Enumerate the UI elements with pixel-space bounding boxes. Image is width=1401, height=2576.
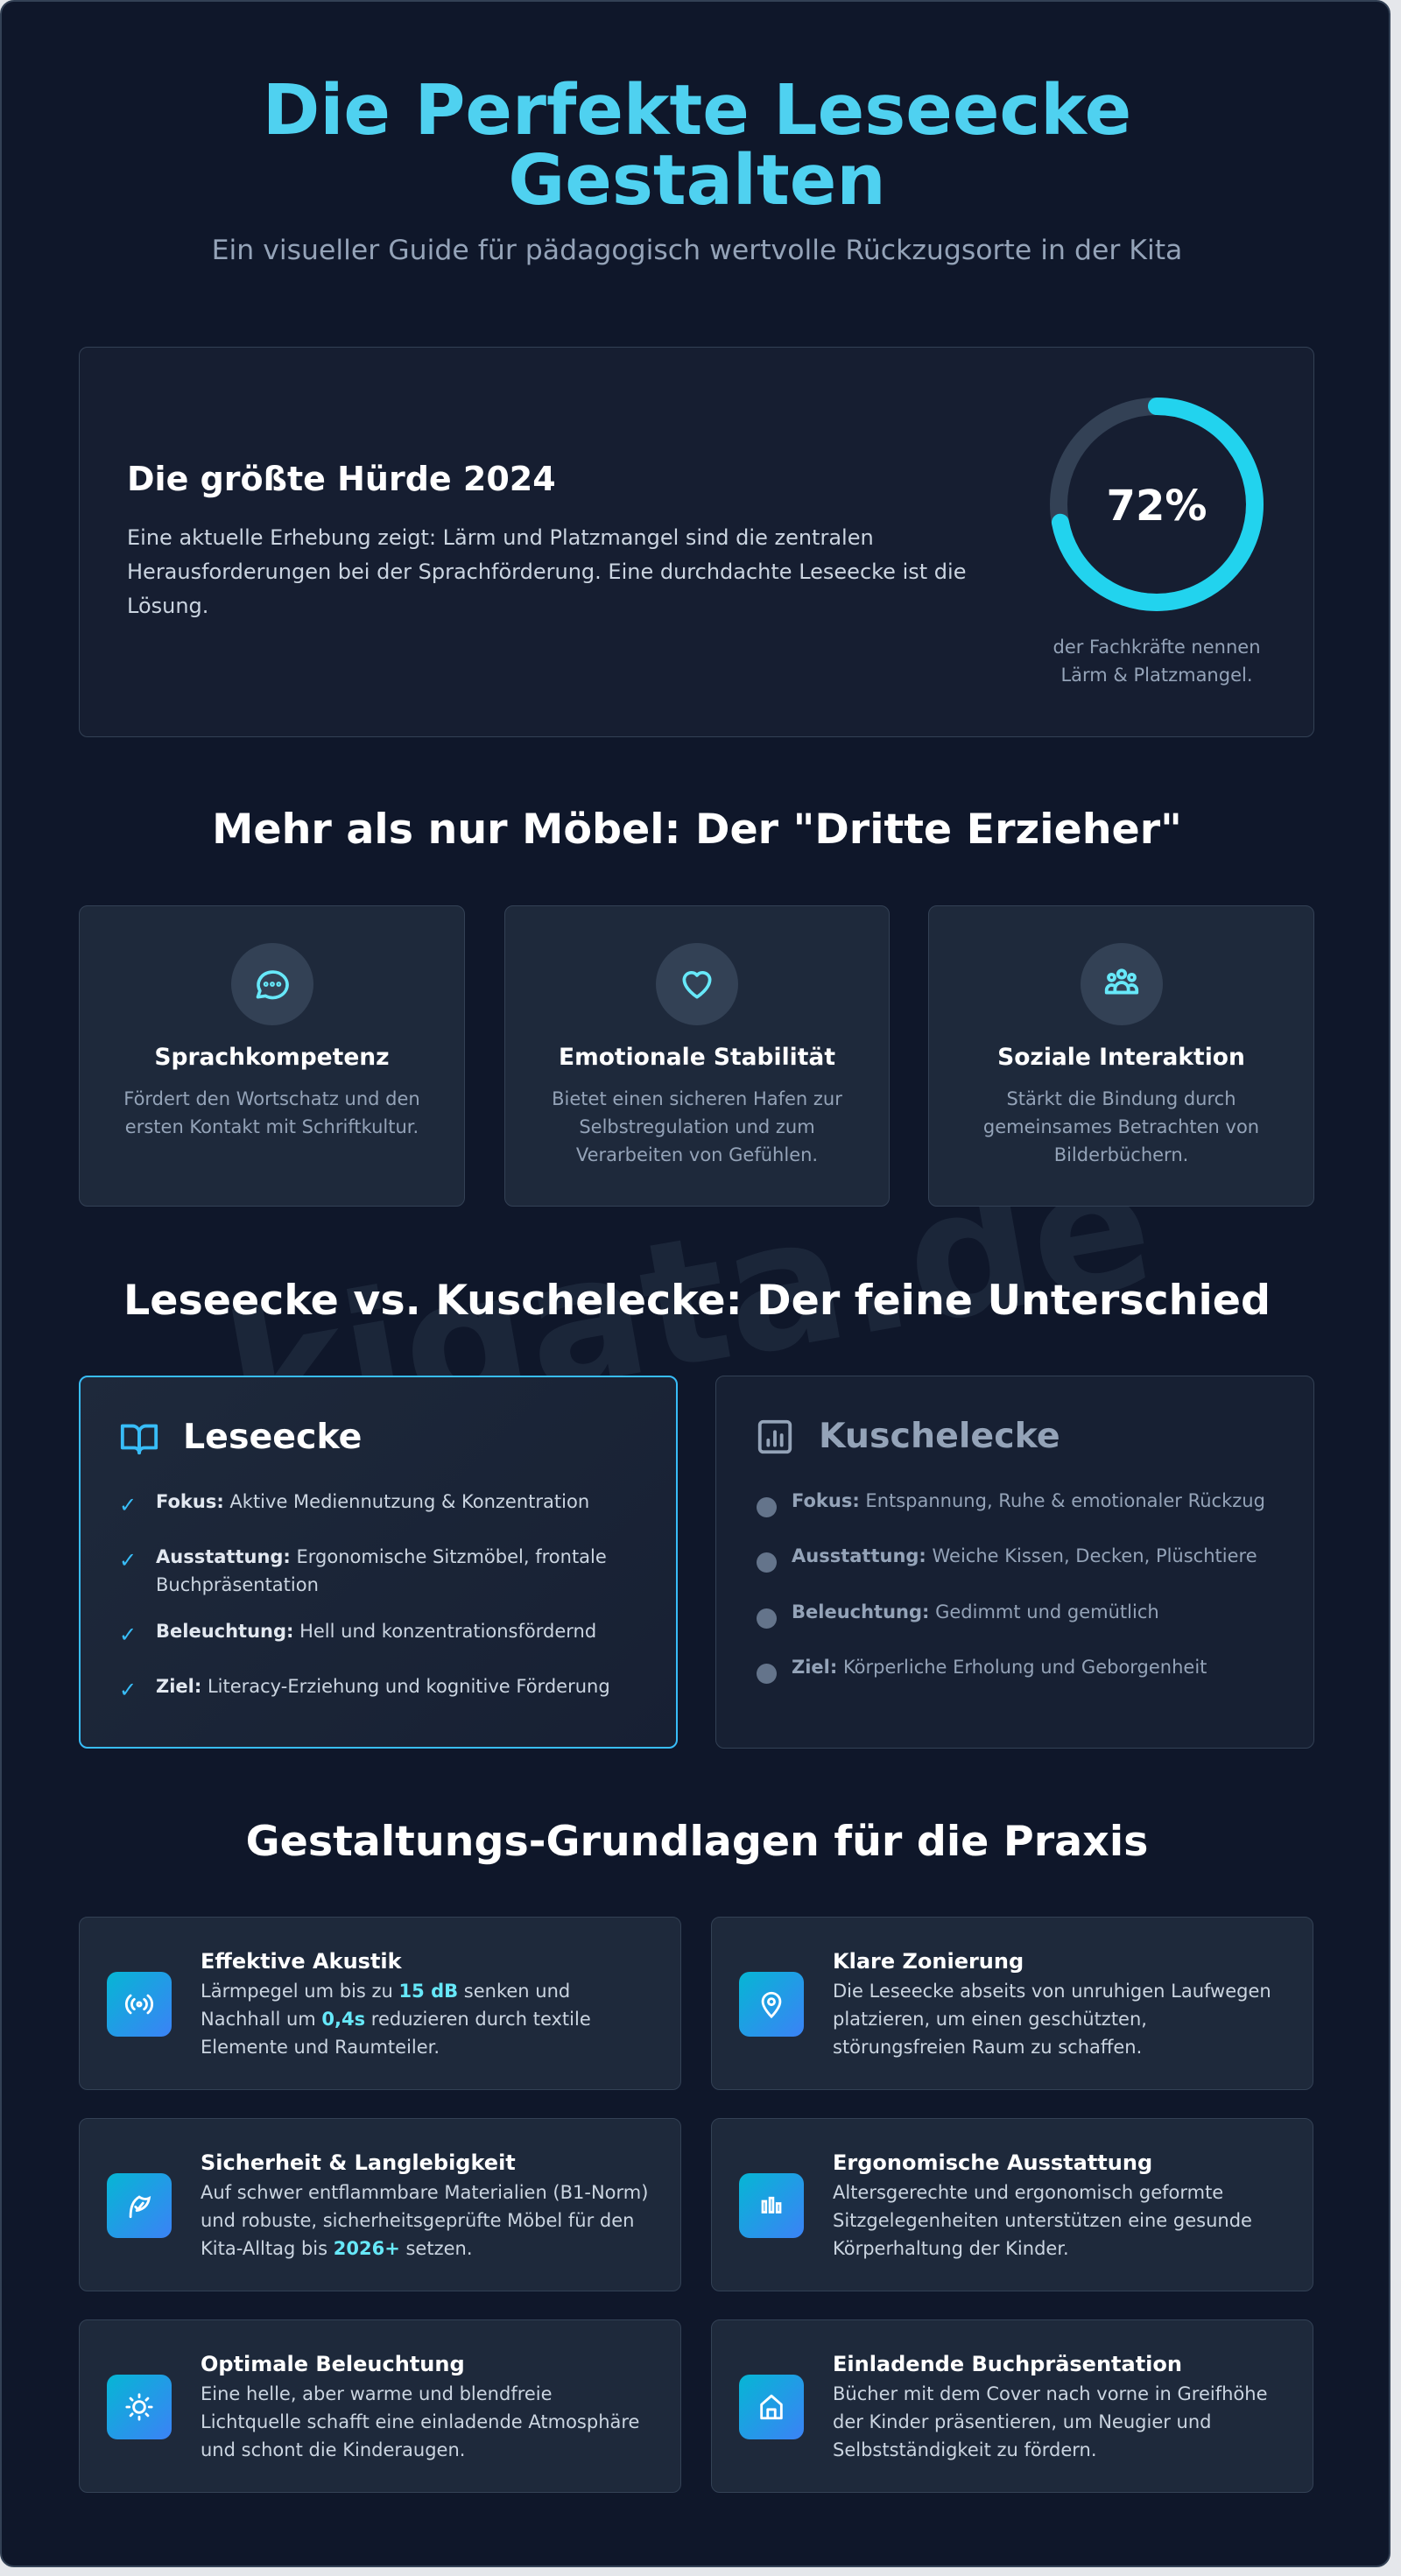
panel: zonierung: Klare Zonierung <box>833 1949 1024 1974</box>
icon: book <box>121 1424 158 1455</box>
panel: zonierung: Die Leseecke abseits von unruhigen Laufwegen platzieren, um einen geschützten, störungsfreien Raum zu schaffen. <box>833 1981 1271 2058</box>
panel: akustik <box>79 1917 681 2090</box>
watermark: kigata.de <box>213 1122 1166 1484</box>
icon: shield <box>107 2173 172 2238</box>
kuschelecke list: Ziel: Körperliche Erholung und Geborgenheit <box>792 1657 1207 1678</box>
icon: sound <box>107 1972 172 2037</box>
title <box>263 70 1131 221</box>
title: Gestalten <box>508 140 886 221</box>
panel: leseecke <box>79 1376 678 1749</box>
icon: heart <box>656 943 738 1025</box>
donut caption: der Fachkräfte nennen <box>1053 637 1261 658</box>
panel: buchpräsentation: Bücher mit dem Cover nach vorne in Greifhöhe der Kinder präsentieren, um Neugier und Selbstständigkeit zu fördern. <box>833 2383 1268 2460</box>
icon: group <box>1081 943 1163 1025</box>
panel: sprachkompetenz <box>79 905 465 1207</box>
panel: zonierung <box>711 1917 1313 2090</box>
panel: soziale interaktion: Soziale Interaktion <box>997 1044 1245 1071</box>
panel: emotionale stabilität: Bietet einen sicheren Hafen zur Selbstregulation und zum Verarbeiten von Gefühlen. <box>552 1088 842 1165</box>
panel: sicherheit <box>79 2118 681 2291</box>
panel: sprachkompetenz: Sprachkompetenz <box>154 1044 390 1071</box>
panel: beleuchtung: Eine helle, aber warme und blendfreie Lichtquelle schafft eine einladende Atmosphäre und schont die Kinderaugen. <box>201 2383 639 2460</box>
panel: beleuchtung: Optimale Beleuchtung <box>201 2352 465 2376</box>
panel: kuschelecke <box>715 1376 1314 1749</box>
leseecke list: ✓ <box>119 1678 137 1702</box>
panel: buchpräsentation <box>711 2319 1313 2493</box>
heading: vergleich: Leseecke vs. Kuschelecke: Der feine Unterschied <box>123 1277 1271 1325</box>
title: Die Perfekte Leseecke <box>263 70 1131 151</box>
panel: sicherheit: Sicherheit & Langlebigkeit <box>201 2150 516 2175</box>
icon: chart <box>758 1420 792 1453</box>
panel: akustik: Effektive Akustik <box>201 1949 402 1974</box>
heading: grundlagen: Gestaltungs-Grundlagen für die Praxis <box>246 1818 1148 1866</box>
leseecke list: Beleuchtung: Hell und konzentrationsfördernd <box>156 1621 596 1642</box>
panel: sprachkompetenz: Fördert den Wortschatz und den ersten Kontakt mit Schriftkultur. <box>123 1088 420 1137</box>
kuschelecke heading: Kuschelecke <box>819 1416 1060 1456</box>
hero text: Eine aktuelle Erhebung zeigt: Lärm und Platzmangel sind die zentralen Herausforderungen bei der Sprachförderung. Eine durchdachte Leseecke ist die Lösung. <box>127 525 966 618</box>
kuschelecke list: Fokus: Entspannung, Ruhe & emotionaler Rückzug <box>792 1490 1265 1511</box>
leseecke list: ✓ <box>119 1493 137 1517</box>
donut caption <box>1053 637 1261 686</box>
leseecke list: ✓ <box>119 1622 137 1647</box>
leseecke list: Ziel: Literacy-Erziehung und kognitive Förderung <box>156 1676 610 1697</box>
heading: dritter erzieher: Mehr als nur Möbel: Der "Dritte Erzieher" <box>212 806 1182 854</box>
leseecke list: Ausstattung: Ergonomische Sitzmöbel, frontale Buchpräsentation <box>156 1546 607 1595</box>
panel: buchpräsentation: Einladende Buchpräsentation <box>833 2352 1182 2376</box>
panel: soziale interaktion: Stärkt die Bindung durch gemeinsames Betrachten von Bilderbüchern. <box>983 1088 1259 1165</box>
leseecke list <box>119 1491 610 1702</box>
donut caption: Lärm & Platzmangel. <box>1060 665 1253 686</box>
panel: ergonomie <box>711 2118 1313 2291</box>
panel: soziale interaktion <box>928 905 1314 1207</box>
panel: beleuchtung <box>79 2319 681 2493</box>
panel: emotionale stabilität: Emotionale Stabilität <box>559 1044 835 1071</box>
subtitle: Ein visueller Guide für pädagogisch wertvolle Rückzugsorte in der Kita <box>212 235 1182 266</box>
donut chart 72% <box>1050 398 1264 611</box>
panel: ergonomie: Ergonomische Ausstattung <box>833 2150 1152 2175</box>
panel: ergonomie: Altersgerechte und ergonomisch geformte Sitzgelegenheiten unterstützen eine gesunde Körperhaltung der Kinder. <box>833 2182 1252 2259</box>
donut chart 72%: 72% <box>1107 482 1207 531</box>
icon: bulb <box>107 2375 172 2439</box>
icon: house <box>739 2375 804 2439</box>
panel: hero stat <box>79 347 1314 737</box>
panel: sicherheit: Auf schwer entflammbare Materialien (B1-Norm) und robuste, sicherheitsgeprüfte Möbel für den Kita-Alltag bis 2026+ setzen. <box>201 2182 648 2259</box>
kuschelecke list <box>757 1490 1265 1684</box>
icon: bars <box>739 2173 804 2238</box>
leseecke heading: Leseecke <box>183 1417 362 1457</box>
leseecke list: Fokus: Aktive Mediennutzung & Konzentration <box>156 1491 589 1512</box>
kuschelecke list: Beleuchtung: Gedimmt und gemütlich <box>792 1601 1159 1622</box>
icon: chat <box>231 943 313 1025</box>
icon: pin <box>739 1972 804 2037</box>
kuschelecke list: Ausstattung: Weiche Kissen, Decken, Plüschtiere <box>792 1545 1257 1566</box>
panel: akustik: Lärmpegel um bis zu 15 dB senken und Nachhall um 0,4s reduzieren durch textile Elemente und Raumteiler. <box>201 1981 591 2058</box>
panel: emotionale stabilität <box>504 905 890 1207</box>
hero heading: Die größte Hürde 2024 <box>127 460 556 498</box>
leseecke list: ✓ <box>119 1548 137 1573</box>
